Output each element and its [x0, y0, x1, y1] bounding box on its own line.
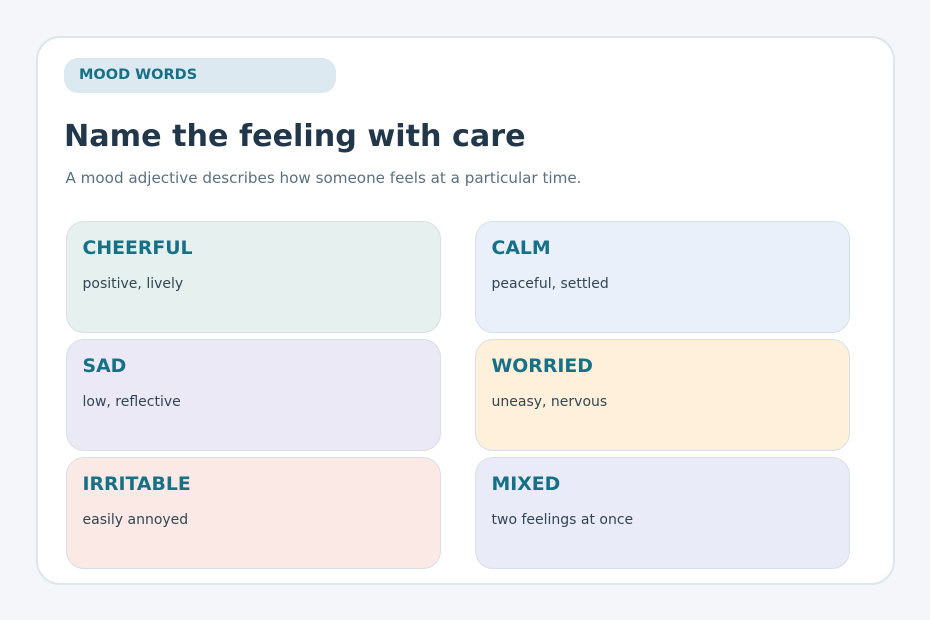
- heading: sad: SAD: [82, 356, 126, 377]
- text: worried description: uneasy, nervous: [492, 394, 607, 410]
- title: Name the feeling with care: [64, 119, 526, 154]
- heading: worried: WORRIED: [492, 356, 593, 377]
- text: irritable description: easily annoyed: [82, 512, 188, 528]
- panel: worried: [475, 339, 850, 451]
- badge label: MOOD WORDS: [79, 66, 197, 82]
- text: mixed description: two feelings at once: [492, 512, 633, 528]
- text: cheerful description: positive, lively: [82, 276, 183, 292]
- badge: mood words: [64, 58, 336, 93]
- heading: mixed: MIXED: [492, 474, 560, 495]
- heading: cheerful: CHEERFUL: [82, 238, 193, 259]
- panel: irritable: [66, 457, 441, 569]
- panel: sad: [66, 339, 441, 451]
- panel: calm: [475, 221, 850, 333]
- panel: mixed: [475, 457, 850, 569]
- heading: irritable: IRRITABLE: [82, 474, 191, 495]
- heading: calm: CALM: [492, 238, 551, 259]
- panel: cheerful: [66, 221, 441, 333]
- text: calm description: peaceful, settled: [492, 276, 609, 292]
- subtitle: A mood adjective describes how someone feels at a particular time.: [66, 169, 582, 187]
- text: sad description: low, reflective: [82, 394, 181, 410]
